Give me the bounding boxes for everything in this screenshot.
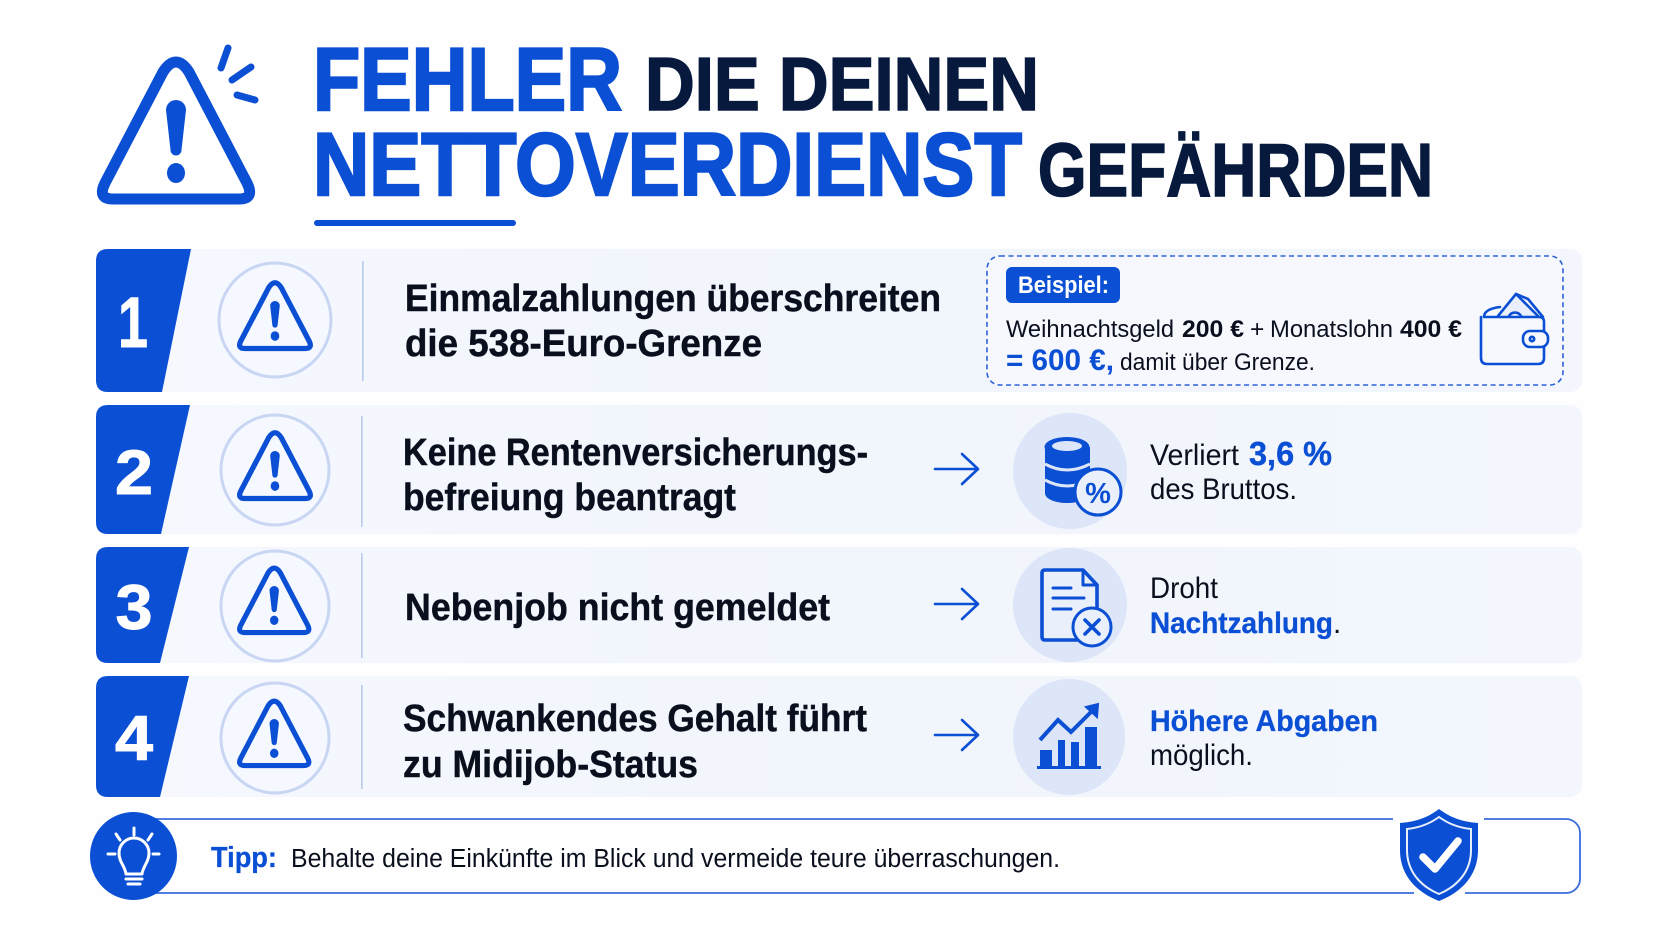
- text: consequence 3: Nachtzahlung: [1150, 607, 1333, 640]
- example text: Weihnachtsgeld: [1006, 316, 1174, 343]
- title: [313, 29, 1433, 214]
- heading: error 2: [403, 432, 868, 519]
- text: consequence 3: [1150, 572, 1341, 640]
- panel: tip: [90, 809, 1580, 901]
- icon: coins with percent: %: [1085, 478, 1111, 510]
- title: GEFÄHRDEN: [1038, 128, 1433, 212]
- example text: Monatslohn: [1270, 316, 1393, 343]
- example text: +: [1250, 316, 1264, 343]
- icon: document with x: [1013, 548, 1127, 662]
- text: consequence 4: Höhere Abgaben: [1150, 705, 1378, 738]
- text: consequence 3: .: [1333, 607, 1341, 640]
- text: consequence 3: Droht: [1150, 572, 1218, 605]
- heading: error 4: Schwankendes Gehalt führt: [403, 698, 867, 740]
- title underline: [314, 220, 516, 226]
- number tab 1: 1: [118, 284, 148, 363]
- example text: [1006, 316, 1462, 377]
- icon: warning in circle 4: [221, 683, 329, 793]
- panel: error 4: [96, 676, 1582, 797]
- panel: error 2: [96, 405, 1582, 534]
- icon: light bulb: [90, 812, 177, 900]
- heading: error 4: zu Midijob-Status: [403, 744, 698, 786]
- arrow 4: [935, 720, 978, 750]
- text: consequence 4: möglich.: [1150, 739, 1253, 772]
- icon: warning in circle 3: [221, 551, 329, 661]
- text: consequence 2: des Bruttos.: [1150, 473, 1297, 506]
- title: DIE DEINEN: [645, 42, 1039, 126]
- heading: error 2: Keine Rentenversicherungs-: [403, 432, 868, 474]
- heading: error 1: [405, 278, 941, 365]
- number tab 3: [96, 547, 189, 663]
- number tab 2: 2: [115, 438, 153, 508]
- example text: damit über Grenze.: [1120, 349, 1315, 376]
- heading: error 1: die 538-Euro-Grenze: [405, 323, 762, 365]
- number tab 3: 3: [116, 573, 152, 643]
- heading: error 1: Einmalzahlungen überschreiten: [405, 278, 941, 320]
- panel: error 1: [96, 249, 1582, 392]
- number tab 4: [96, 676, 189, 797]
- arrow 3: [935, 589, 978, 619]
- example text: = 600 €,: [1006, 344, 1114, 377]
- example text: 400 €: [1400, 316, 1462, 343]
- text: consequence 4: [1150, 705, 1378, 772]
- heading: error 3: Nebenjob nicht gemeldet: [405, 587, 830, 629]
- panel: error 3: [96, 547, 1582, 663]
- icon: large warning triangle: [102, 48, 255, 199]
- icon: warning in circle 1: [219, 263, 331, 377]
- text: tip: Behalte deine Einkünfte im Blick und vermeide teure überraschungen.: [291, 845, 1060, 873]
- heading: error 2: befreiung beantragt: [403, 477, 736, 519]
- example text: 200 €: [1182, 316, 1244, 343]
- number tab 4: 4: [115, 704, 153, 774]
- heading: error 4: [403, 698, 867, 786]
- title: FEHLER: [313, 29, 622, 129]
- text: tip: Tipp:: [211, 842, 277, 874]
- text: consequence 2: 3,6 %: [1249, 435, 1332, 472]
- title: NETTOVERDIENST: [313, 114, 1022, 214]
- icon: rising chart: [1013, 679, 1125, 795]
- icon: shield with check: [1400, 809, 1478, 901]
- arrow 2: [935, 454, 978, 484]
- text: consequence 2: Verliert: [1150, 439, 1239, 472]
- icon: coins with percent: [1013, 413, 1127, 529]
- badge: Beispiel: Beispiel:: [1018, 272, 1109, 299]
- number tab 2: [96, 405, 190, 534]
- badge: Beispiel: [1006, 267, 1120, 303]
- callout: example: [987, 256, 1563, 385]
- icon: warning in circle 2: [221, 415, 329, 525]
- number tab 1: [96, 249, 191, 392]
- icon: wallet: [1481, 294, 1548, 364]
- text: consequence 2: [1150, 435, 1332, 506]
